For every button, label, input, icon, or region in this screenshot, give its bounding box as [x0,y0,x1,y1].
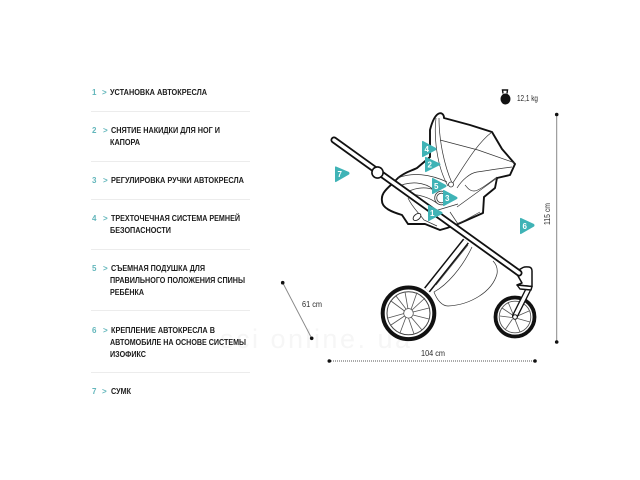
buckle loop [412,212,422,222]
list item 4 [92,214,240,235]
list item 5: 5 [92,264,97,273]
list item 2: > [103,126,108,135]
marker 3 [443,190,458,206]
weight icon and label [500,90,538,104]
list item 5: > [103,264,108,273]
marker 6: 6 [522,222,528,231]
marker 6 [520,218,534,234]
list item 5: РЕБЁНКА [110,288,144,297]
list item 1: > [102,88,107,97]
frame joint [517,267,532,290]
marker 2: 2 [428,160,432,170]
front wheel [496,298,534,336]
list item 1: 1 [92,88,97,97]
list item 2 [92,126,220,147]
seat shell [382,113,515,230]
marker 3: 3 [445,194,450,203]
marker 5 [432,178,446,194]
list item 7: > [102,387,107,396]
list item 5 [92,264,245,297]
list item 4: > [103,214,108,223]
list item 6: АВТОМОБИЛЕ НА ОСНОВЕ СИСТЕМЫ [110,338,246,347]
width dimension [328,349,537,363]
marker 4 [422,141,436,157]
list item 6: ИЗОФИКС [110,350,146,359]
depth dimension [281,281,322,340]
marker 1: 1 [430,209,435,218]
marker 7: 7 [338,170,342,179]
list item 6 [92,326,246,359]
list item 3: 3 [92,176,97,185]
canopy seams [435,118,515,207]
list item 3: РЕГУЛИРОВКА РУЧКИ АВТОКРЕСЛА [111,176,244,185]
infographic canvas: sci online. ua [220,324,411,354]
width dimension: 104 cm [421,349,445,358]
list item 7 [92,387,131,396]
depth dimension: 61 cm [302,300,322,309]
basket [434,247,497,306]
front fork [513,290,528,319]
list item 7: СУМК [111,387,131,396]
height dimension: 115 cm [543,203,552,225]
list item 6: 6 [92,326,97,335]
list item 6: КРЕПЛЕНИЕ АВТОКРЕСЛА В [111,326,215,335]
list item 5: СЪЕМНАЯ ПОДУШКА ДЛЯ [111,264,205,273]
marker 4: 4 [424,145,430,154]
weight icon and label: 12,1 kg [517,94,538,103]
list item 3: > [103,176,108,185]
car seat [382,113,515,230]
list item 4: 4 [92,214,97,223]
marker 1 [428,205,442,221]
adjust ring [435,191,448,205]
list item 1: УСТАНОВКА АВТОКРЕСЛА [110,88,207,97]
list item 2: 2 [92,126,97,135]
list item 4: ТРЕХТОЧЕЧНАЯ СИСТЕМА РЕМНЕЙ [111,214,240,223]
marker 2 [425,157,440,172]
list item 4: БЕЗОПАСНОСТИ [110,226,171,235]
feature list [91,88,250,396]
list item 5: ПРАВИЛЬНОГО ПОЛОЖЕНИЯ СПИНЫ [110,276,245,285]
handle and chassis tube [334,140,519,273]
stroller illustration [334,113,534,339]
list item 2: СНЯТИЕ НАКИДКИ ДЛЯ НОГ И [111,126,220,135]
height dimension [543,113,558,344]
rear wheel [383,288,434,339]
list item 2: КАПОРА [110,138,140,147]
seat lines [395,175,480,226]
rear leg [427,241,468,290]
marker 7 [335,166,350,182]
list item 7: 7 [92,387,97,396]
marker 5: 5 [434,182,439,191]
list item 6: > [103,326,108,335]
